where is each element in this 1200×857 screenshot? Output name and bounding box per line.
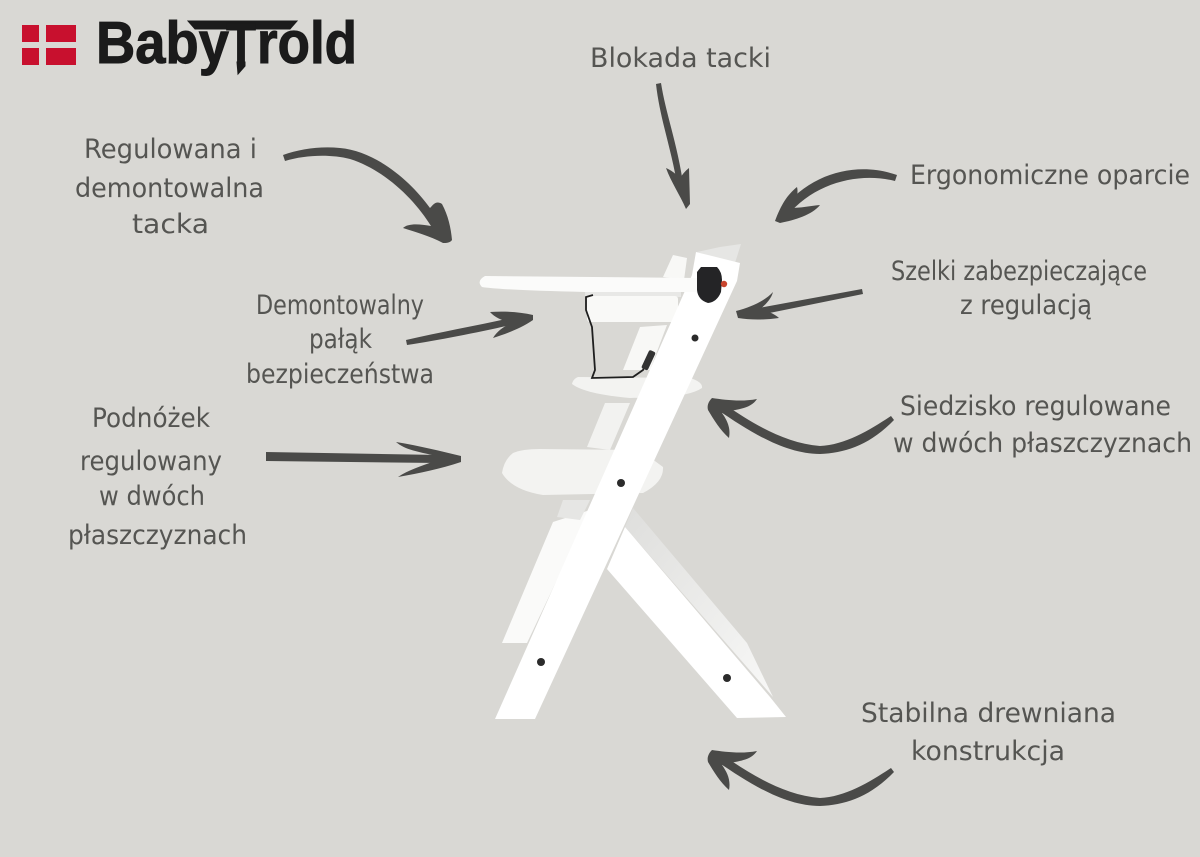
- label: tray: Regulowana i: [84, 134, 257, 165]
- chair: tray: [480, 276, 697, 292]
- bolts: [537, 334, 731, 682]
- label: seat: Siedzisko regulowane: [900, 391, 1171, 422]
- chair: strap: [586, 295, 652, 378]
- arrow: seat: [708, 398, 894, 454]
- label: harness: z regulacją: [960, 290, 1092, 321]
- label: frame: konstrukcja: [911, 736, 1065, 767]
- label: frame: Stabilna drewniana: [861, 698, 1116, 729]
- label: safety bar: [246, 290, 434, 390]
- chair: tray underside: [585, 290, 681, 297]
- chair: back leg: [607, 527, 786, 718]
- chair: rear rail shadow: [625, 508, 773, 697]
- label: footrest: Podnóżek: [92, 403, 210, 434]
- arrow: backrest: [775, 169, 897, 223]
- chair: buckle: [641, 350, 656, 371]
- arrow: safety bar: [406, 312, 533, 345]
- logo wordmark: Baby: [96, 10, 229, 76]
- chair: main post: [495, 252, 740, 719]
- label: seat: [893, 391, 1192, 459]
- chair: safety bar: [587, 296, 678, 322]
- arrow: harness: [736, 289, 863, 320]
- label: safety bar: Demontowalny: [256, 290, 424, 321]
- label: tray lock: Blokada tacki: [590, 43, 771, 74]
- arrow: frame: [708, 750, 894, 806]
- chair: backrest: [663, 255, 687, 280]
- logo wordmark: rold: [257, 10, 357, 76]
- chair: lower rails: [557, 500, 590, 520]
- label: harness: Szelki zabezpieczające: [891, 256, 1147, 287]
- label: tray: [75, 134, 264, 240]
- chair: tray lock hardware: [697, 267, 722, 303]
- chair: footrest rails: [587, 403, 630, 450]
- arrow: footrest: [266, 442, 461, 477]
- label: footrest: regulowany: [80, 446, 222, 477]
- chair: top fin: [697, 244, 741, 263]
- icon: Danish flag: [22, 25, 76, 65]
- label: tray: tacka: [132, 209, 209, 240]
- label: footrest: płaszczyznach: [68, 520, 247, 551]
- logo wordmark: T: [226, 11, 256, 80]
- arrow: tray: [283, 147, 452, 243]
- logo: BabyTrold: [22, 10, 357, 80]
- label: harness: [891, 256, 1147, 321]
- logo wordmark: [96, 10, 357, 80]
- label: footrest: [68, 403, 247, 551]
- chair: seat back: [623, 325, 667, 370]
- label: tray: demontowalna: [75, 173, 264, 204]
- label: footrest: w dwóch: [99, 481, 205, 512]
- chair: footrest: [502, 449, 663, 495]
- chair: back support leg: [502, 510, 590, 643]
- high chair illustration: [480, 244, 786, 719]
- label: safety bar: pałąk: [309, 324, 372, 355]
- chair: red button: [721, 281, 727, 287]
- label: frame: [861, 698, 1116, 767]
- chair: seat: [572, 377, 702, 398]
- label: safety bar: bezpieczeństwa: [246, 359, 434, 390]
- arrow: tray lock: [656, 83, 690, 209]
